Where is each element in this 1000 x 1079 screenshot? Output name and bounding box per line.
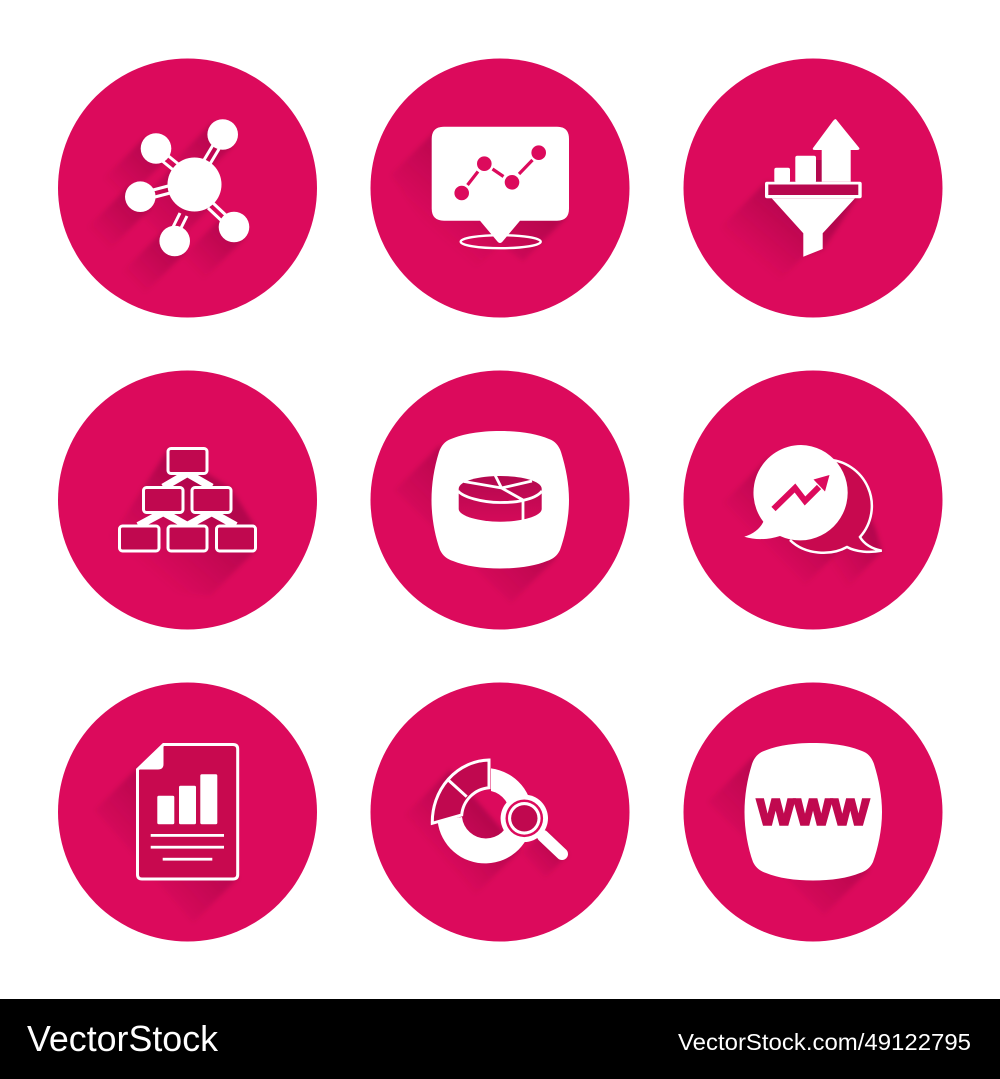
icon: donut chart with exploded segment	[432, 760, 533, 863]
icon: network nodes	[125, 119, 249, 256]
icon: chart speech bubble	[432, 127, 569, 248]
icon: hierarchy boxes	[120, 448, 256, 551]
panel: location chart bubble icon	[370, 58, 630, 318]
icon: white rounded tile	[432, 431, 569, 568]
panel: network hub icon	[58, 58, 317, 318]
panel: donut chart search icon	[370, 682, 630, 942]
panel: hierarchy flowchart icon	[58, 370, 317, 630]
panel: www tile icon	[684, 682, 942, 942]
icon: funnel with rising bars and arrow	[765, 119, 862, 257]
icon: back speech bubble outline	[790, 460, 882, 553]
icon: document with bar chart	[138, 744, 238, 879]
www text: WWW	[757, 792, 869, 832]
panel: trend chat bubbles icon	[684, 370, 942, 630]
panel: pie chart tile icon	[370, 370, 630, 630]
icon: trend arrow	[774, 475, 830, 509]
footer brand: VectorStock	[27, 1018, 219, 1059]
icon: front speech bubble	[744, 445, 848, 540]
panel: report document icon	[58, 682, 317, 942]
icon: 3D pie chart	[458, 475, 542, 522]
icon: magnifying glass	[501, 795, 562, 854]
icon: white rounded tile	[744, 743, 882, 880]
footer image id: VectorStock.com/49122795	[678, 1029, 971, 1055]
footer bar	[0, 999, 1000, 1079]
panel: funnel growth icon	[684, 58, 942, 318]
